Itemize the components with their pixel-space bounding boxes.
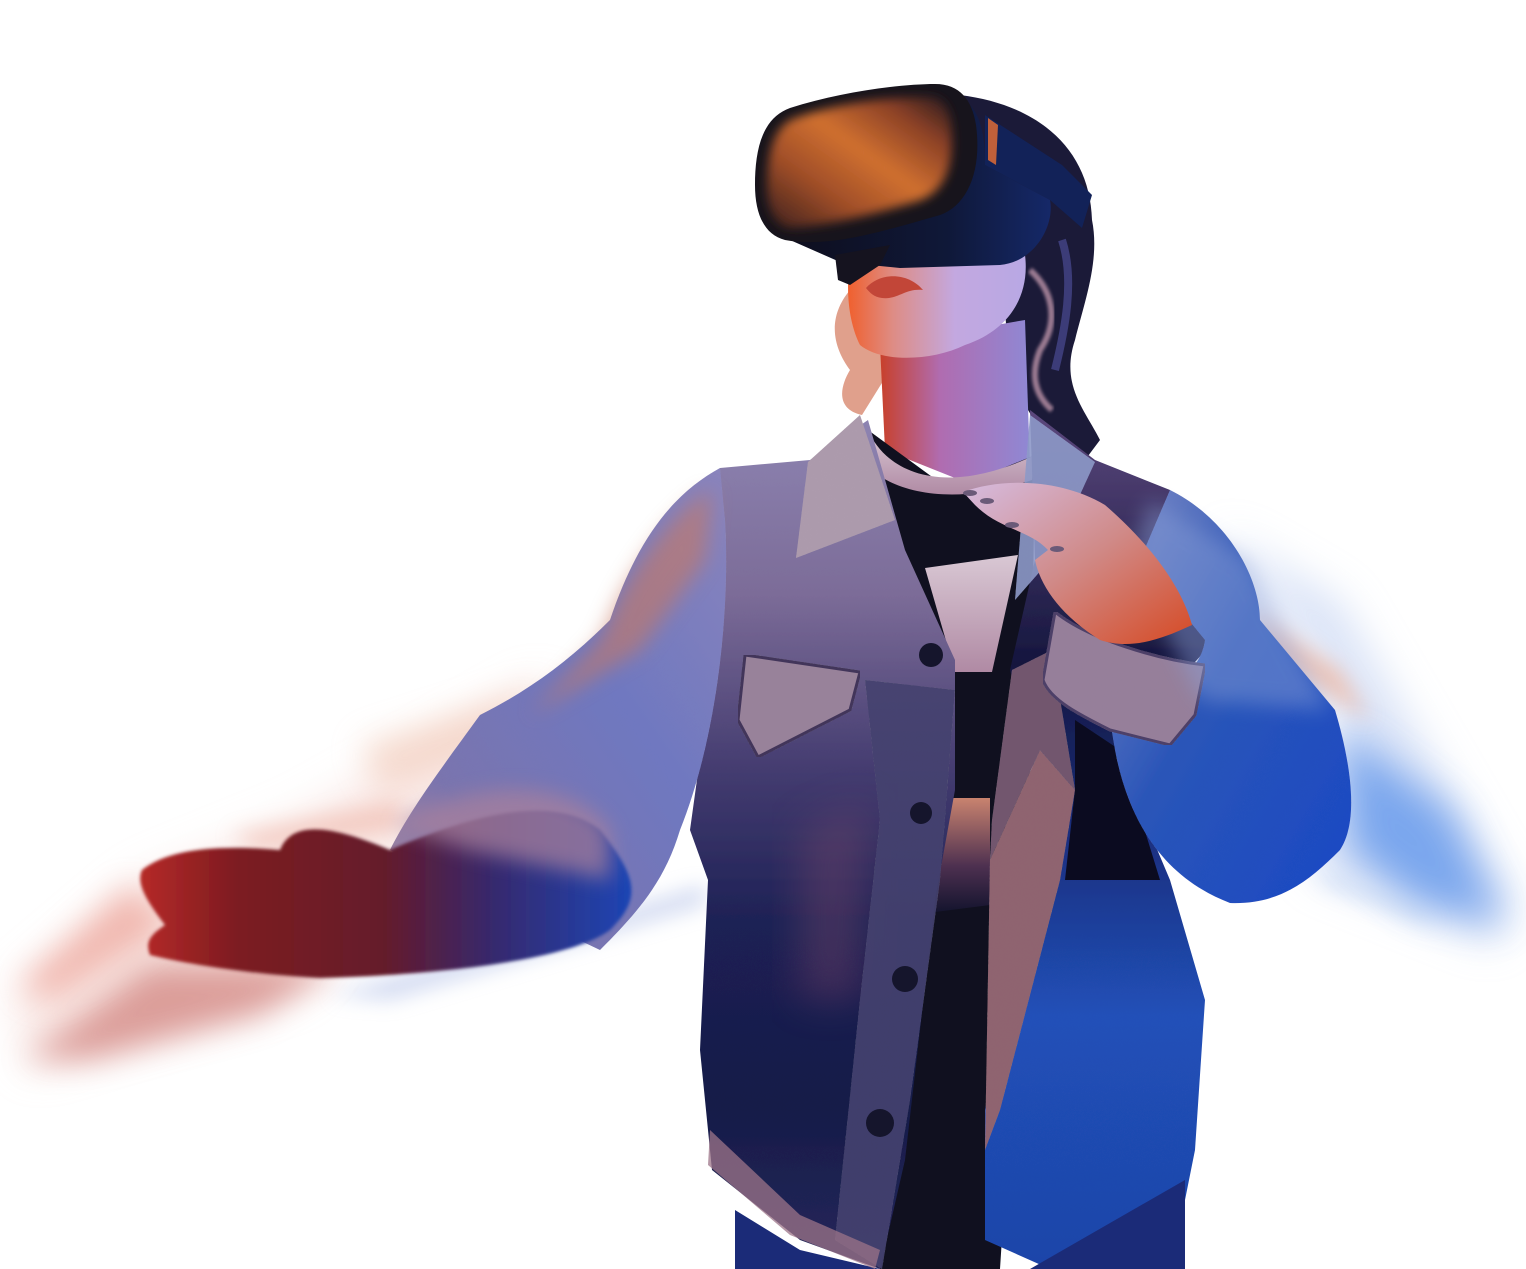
front hem shading (708, 1130, 880, 1269)
jacket: left chest pocket (738, 655, 860, 757)
headset nose piece (835, 245, 890, 285)
headset visor (755, 84, 977, 242)
jacket: right collar (1015, 415, 1095, 600)
left forearm and hand (140, 811, 631, 978)
motion blur: right arm trails (1220, 530, 1515, 945)
right cuff (1043, 612, 1205, 745)
VR headset (755, 84, 1092, 285)
jacket: left placket (835, 680, 955, 1269)
left hand motion glow (395, 790, 610, 880)
jacket: right upper lapel (990, 650, 1075, 860)
jacket: right lapel and strip (985, 750, 1075, 1150)
jacket: right front panel (980, 400, 1220, 1269)
left arm sleeve (390, 468, 726, 950)
jacket buttons (866, 643, 943, 1137)
right sleeve (1110, 490, 1351, 903)
fingernails (963, 490, 1064, 552)
dark jacket shadow (1065, 720, 1160, 880)
hair (835, 95, 1100, 460)
mouth (866, 276, 923, 298)
left arm orange highlight (530, 490, 712, 715)
headset strap (985, 115, 1092, 228)
neck (880, 320, 1030, 480)
raised right hand (963, 483, 1192, 644)
red highlights on lower panel (800, 800, 870, 1000)
headset body (790, 90, 1051, 268)
face (848, 255, 1026, 358)
jeans (735, 1180, 1185, 1269)
inner tee and dark top (868, 430, 1035, 1269)
jacket: left collar (796, 415, 895, 558)
jacket: left front panel (690, 420, 955, 1269)
motion blur: left hand trails (10, 680, 705, 1070)
right sleeve translucent overlay (1130, 500, 1330, 710)
strap orange edge (988, 118, 998, 165)
